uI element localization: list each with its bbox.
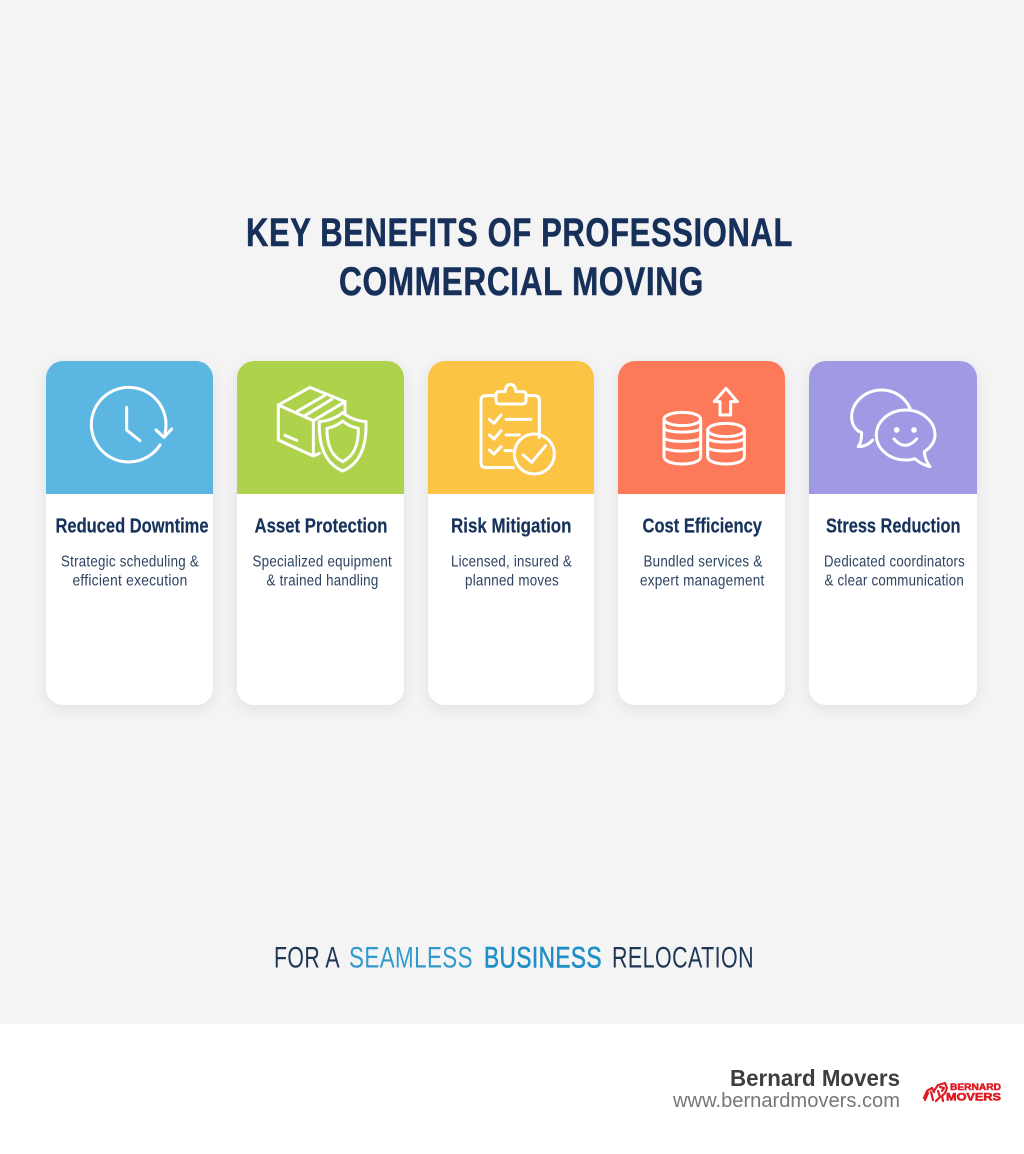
description [252, 554, 392, 590]
heading: Reduced Downtime: Reduced Downtime [56, 516, 208, 538]
heading: Asset Protection: Asset Protection [254, 516, 388, 538]
tagline: BUSINESS [484, 942, 602, 974]
tagline: FOR A [274, 942, 340, 974]
panel: Asset Protection [237, 361, 404, 705]
header: blue [46, 361, 213, 494]
description: Strategic scheduling & [61, 554, 199, 570]
title: COMMERCIAL MOVING [339, 260, 704, 304]
panel: Risk Mitigation [428, 361, 594, 705]
title [246, 211, 793, 304]
description: Bundled services & [644, 554, 763, 570]
website: www.bernardmovers.com [672, 1090, 900, 1112]
logo [924, 1082, 1001, 1104]
description: Specialized equipment [252, 554, 392, 570]
description: & clear communication [824, 572, 964, 590]
tagline: RELOCATION [612, 942, 754, 974]
header: lavender [809, 361, 977, 494]
heading: Cost Efficiency: Cost Efficiency [642, 516, 763, 538]
description [451, 554, 572, 590]
description: efficient execution [72, 572, 188, 590]
description: Licensed, insured & [451, 554, 572, 570]
icon: coin stacks with arrow [664, 388, 744, 464]
logo wordmark: MOVERS [946, 1092, 1001, 1104]
panel: Stress Reduction [809, 361, 977, 705]
icon: box with shield [278, 387, 366, 471]
description: Dedicated coordinators [824, 554, 965, 570]
description [61, 554, 199, 590]
icon: clipboard checklist [481, 384, 554, 474]
heading: Stress Reduction: Stress Reduction [826, 516, 960, 538]
footer band [0, 1024, 1024, 1154]
description [824, 554, 965, 590]
header: coral [618, 361, 785, 494]
panel: Reduced Downtime [46, 361, 213, 705]
heading: Risk Mitigation: Risk Mitigation [451, 516, 572, 538]
panel: Cost Efficiency [618, 361, 785, 705]
title: KEY BENEFITS OF PROFESSIONAL [246, 211, 793, 255]
description: & trained handling [266, 572, 378, 590]
description: planned moves [465, 572, 559, 590]
icon: lion [924, 1083, 947, 1101]
header: yellow [428, 361, 594, 494]
tagline: SEAMLESS [349, 942, 473, 974]
description [640, 554, 765, 590]
tagline [274, 942, 754, 974]
company name: Bernard Movers [730, 1065, 900, 1091]
logo wordmark: BERNARD [950, 1082, 1001, 1093]
logo wordmark [946, 1082, 1001, 1104]
header: green [237, 361, 404, 494]
description: expert management [640, 572, 765, 590]
icon: clock with arrow [91, 387, 172, 462]
icon: chat bubbles with smile [852, 390, 935, 467]
